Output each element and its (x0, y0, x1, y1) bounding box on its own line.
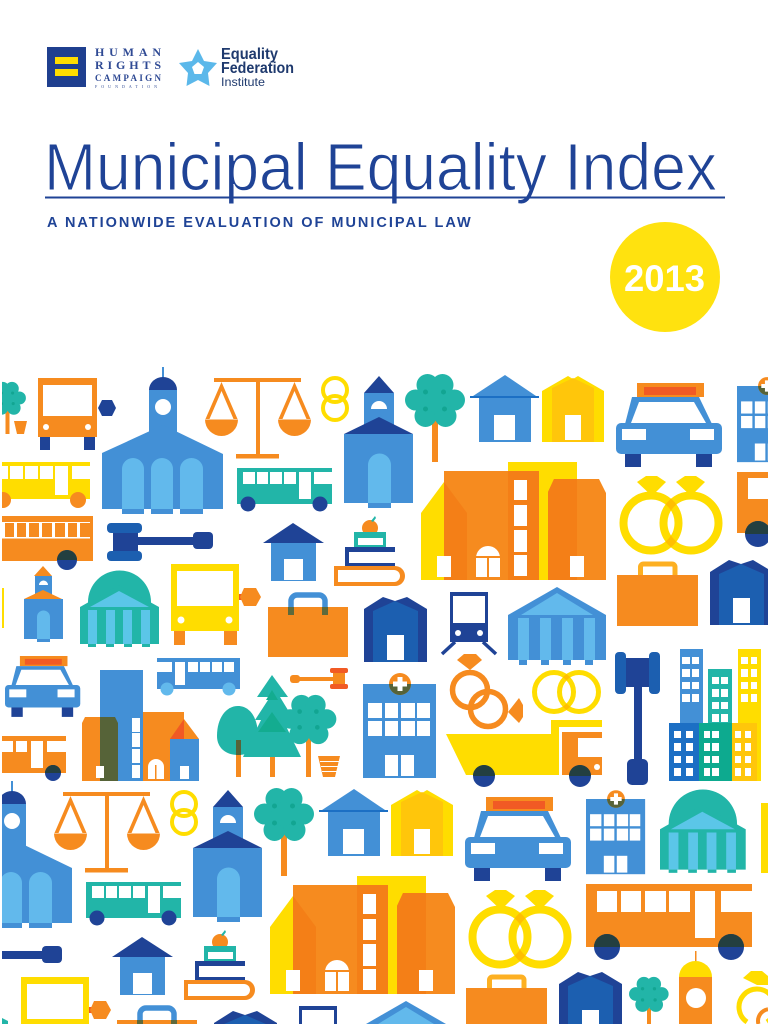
Equality Federation text: Equality (221, 46, 278, 63)
icon: blue star (179, 49, 217, 86)
icon: small orange gavel (290, 668, 348, 689)
yellow sliver left edge (2, 588, 4, 628)
icon: large teal capitol (660, 789, 746, 873)
icon: small orange bus (2, 736, 66, 781)
icon: mixed buildings (82, 670, 199, 781)
subtitle: A NATIONWIDE EVALUATION OF MUNICIPAL LAW (47, 215, 473, 231)
icon: orange briefcase bottom (466, 977, 547, 1024)
icon: blue bus (157, 658, 240, 696)
icon: blue house repeat (319, 789, 388, 856)
logo: Equality Federation Institute (179, 46, 294, 89)
icon: orange rings with diamonds (452, 654, 523, 726)
icon: house with navy roof (263, 523, 324, 581)
icon: orange bus right edge (737, 472, 768, 547)
icon: small tree bottom (629, 977, 669, 1024)
icon: chapel repeat (193, 790, 262, 922)
icon: hospital repeat (586, 790, 645, 874)
icon: navy house bottom (559, 972, 622, 1024)
Equality Federation text (221, 46, 294, 89)
icon: orange bus front (38, 378, 116, 450)
icon: large orange bus (586, 884, 752, 960)
Equality Federation text: Federation (221, 60, 294, 77)
icon: yellow bus bottom (21, 977, 111, 1024)
icon: orange and yellow buildings (421, 462, 606, 580)
icon: chapel (344, 376, 413, 508)
icon: teal bus repeat (86, 882, 181, 926)
icon: navy house (364, 597, 427, 662)
icon: stack of books (334, 516, 405, 586)
icon: orange briefcase (617, 564, 698, 626)
logo: Human Rights Campaign Foundation (47, 45, 162, 89)
HRC logotype text: HUMAN (95, 45, 161, 59)
HRC logotype text: FOUNDATION (95, 84, 157, 89)
icon: books repeat (184, 930, 255, 1000)
icon: scales of justice (205, 378, 311, 458)
icon: vertical gavel (615, 652, 660, 785)
icon: briefcase blue handle bottom (117, 1008, 197, 1024)
HRC logotype text (95, 45, 162, 89)
icon: small tree and basket top left (0, 382, 27, 434)
year badge (610, 222, 720, 332)
icon: yellow house (542, 376, 604, 442)
icon: police car (616, 383, 722, 467)
icon: teal capitol sliver (2, 1018, 8, 1024)
icon: ring at right edge (739, 971, 768, 1024)
icon: small police car (5, 656, 80, 717)
year badge: 2013 (624, 258, 705, 299)
icon: navy house bottom left (214, 1011, 277, 1024)
HRC logotype text: CAMPAIGN (95, 73, 162, 83)
icon: teal capitol (80, 571, 159, 647)
icon: tree (405, 374, 465, 462)
icon: briefcase blue handle (268, 595, 348, 657)
icon: orange bus side (2, 516, 93, 570)
HRC logotype text: RIGHTS (95, 58, 161, 72)
icon: HRC equal sign square (47, 47, 86, 87)
icon: hospital (363, 673, 436, 778)
icon: navy house right edge (710, 560, 768, 625)
icon: orange clock tower (679, 951, 712, 1024)
icon: navy gavel repeat (0, 937, 62, 975)
icon: pillars bottom (366, 1001, 446, 1024)
icon: gold wedding rings (624, 476, 718, 550)
icon: yellow rings (534, 672, 598, 712)
icon: train (442, 592, 496, 654)
icon: scales repeat (54, 792, 160, 872)
icon: buildings repeat (270, 876, 455, 994)
icon: yellow bus front (171, 564, 261, 645)
icon: teal bus (237, 468, 332, 512)
icon: hospital right edge (737, 377, 768, 462)
icon: blue house (470, 375, 539, 442)
icon: city skyline (669, 649, 761, 781)
icon: pillared building (508, 587, 606, 665)
icon: gold rings repeat (472, 890, 568, 964)
icon: dump truck (446, 720, 602, 787)
icon: linked rings repeat (172, 792, 196, 834)
icon: train bottom (299, 1006, 337, 1024)
title: Municipal Equality Index (44, 130, 717, 205)
icon: church (102, 367, 223, 514)
icon: house navy roof repeat (112, 937, 173, 995)
icon: yellow house repeat (391, 790, 453, 856)
yellow sliver right edge (761, 803, 768, 873)
icon: tree repeat (254, 788, 314, 876)
icon: linked rings (323, 378, 347, 420)
icon: church repeat (0, 781, 72, 928)
icon: small chapel orange roof (24, 566, 63, 642)
icon: yellow bus side (0, 462, 90, 508)
icon: navy gavel (107, 523, 213, 561)
icon: group of trees (217, 675, 340, 777)
icon: police car repeat (465, 797, 571, 881)
Equality Federation text: Institute (221, 75, 265, 89)
